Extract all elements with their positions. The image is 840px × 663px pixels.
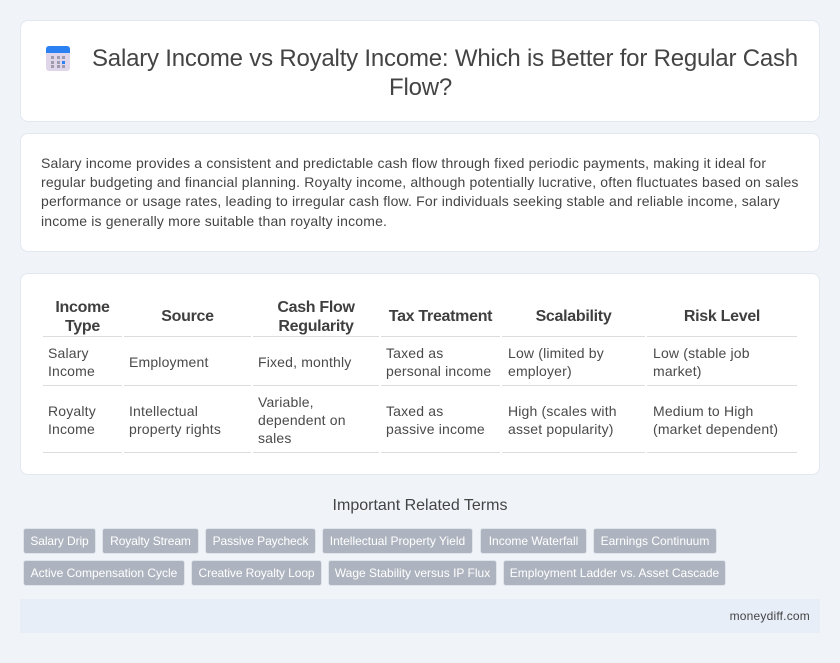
row: salary income: Salary [48, 345, 89, 361]
comparison table [43, 299, 797, 453]
column headers: Regularity [278, 318, 354, 335]
row: salary income: Income [48, 363, 95, 379]
row: salary income: personal income [386, 363, 491, 379]
related terms chips: Creative Royalty Loop [199, 566, 314, 580]
row: royalty income: Royalty [48, 403, 96, 419]
column headers: Source [161, 308, 214, 325]
row: royalty income: asset popularity) [508, 421, 614, 437]
panel: comparison table card [20, 273, 820, 475]
row: salary income: market) [653, 363, 702, 379]
row: salary income: Taxed as [386, 345, 443, 361]
related terms chips: Passive Paycheck [213, 534, 308, 548]
row: salary income: Fixed, monthly [258, 354, 351, 370]
related terms chips: Income Waterfall [489, 534, 578, 548]
column headers: Income [55, 299, 110, 316]
row: royalty income: Variable, [258, 394, 314, 410]
row: salary income [48, 345, 750, 379]
row: salary income: Low (stable job [653, 345, 750, 361]
related terms chips: Employment Ladder vs. Asset Cascade [510, 566, 719, 580]
text block: summary: regular budgeting and financial planning. Royalty income, although potentially lucrative, often fluctuates based on sales [41, 174, 799, 190]
text block: summary: income is generally more suitable than royalty income. [41, 213, 387, 229]
footer brand: moneydiff.com [730, 609, 810, 623]
column headers: Type [65, 318, 100, 335]
title: Salary Income vs Royalty Income: Which is Better for Regular Cash [92, 45, 798, 72]
related terms chips: Active Compensation Cycle [31, 566, 177, 580]
row: salary income: employer) [508, 363, 572, 379]
panel: title card [20, 20, 820, 122]
related terms chips: Earnings Continuum [601, 534, 709, 548]
column headers: Cash Flow [277, 299, 355, 316]
column headers: Risk Level [684, 308, 760, 325]
footer bar [20, 599, 820, 633]
row: royalty income: sales [258, 430, 292, 446]
panel: summary card [20, 133, 820, 252]
column headers: Tax Treatment [389, 308, 492, 325]
row: royalty income: Taxed as [386, 403, 443, 419]
row: royalty income: dependent on [258, 412, 346, 428]
text block: summary: Salary income provides a consistent and predictable cash flow through fixed periodic payments, making it ideal for [41, 155, 766, 171]
row: salary income: Low (limited by [508, 345, 604, 361]
row: salary income: Employment [129, 354, 209, 370]
row: royalty income: Medium to High [653, 403, 753, 419]
row: royalty income [48, 394, 778, 446]
row: royalty income: Income [48, 421, 95, 437]
related terms chips: Intellectual Property Yield [330, 534, 465, 548]
text block: summary: performance or usage rates, leading to irregular cash flow. For individuals seeking stable and reliable income, salary [41, 193, 780, 209]
related terms chips [23, 528, 726, 586]
column headers: Scalability [536, 308, 611, 325]
title: Flow? [389, 74, 452, 101]
row: royalty income: Intellectual [129, 403, 198, 419]
icon: calendar [46, 46, 70, 71]
heading: related terms: Important Related Terms [333, 497, 507, 514]
text block: summary [41, 155, 799, 229]
column headers [55, 299, 760, 335]
related terms chips: Royalty Stream [110, 534, 191, 548]
row: royalty income: High (scales with [508, 403, 617, 419]
related terms chips: Salary Drip [30, 534, 89, 548]
title [92, 45, 798, 101]
row: royalty income: property rights [129, 421, 221, 437]
row: royalty income: (market dependent) [653, 421, 778, 437]
related terms chips: Wage Stability versus IP Flux [335, 566, 490, 580]
row: royalty income: passive income [386, 421, 485, 437]
